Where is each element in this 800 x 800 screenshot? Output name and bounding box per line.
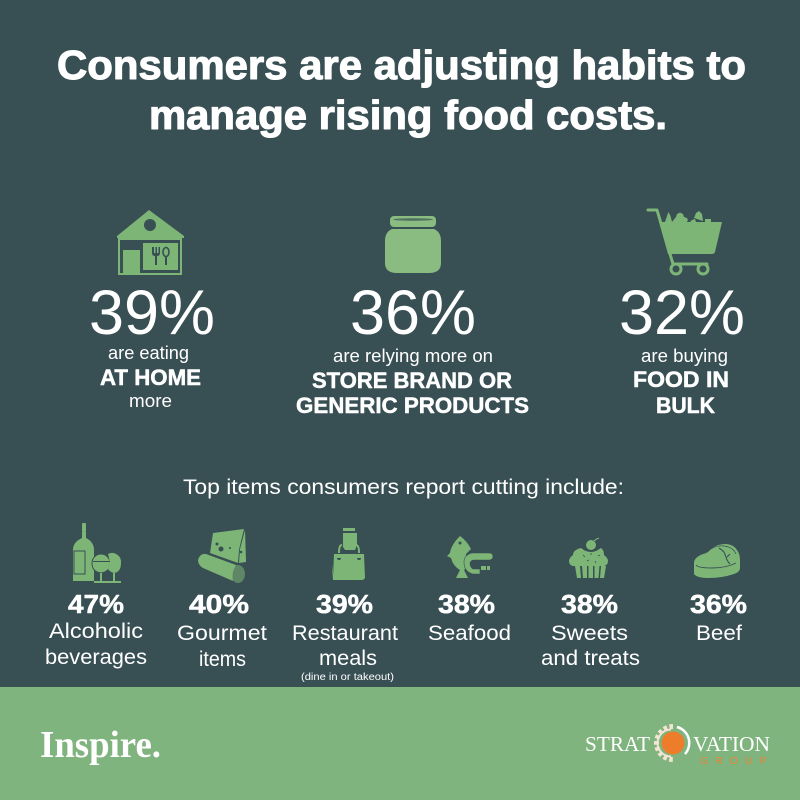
icon: steak xyxy=(694,544,740,578)
stat: store brand xyxy=(296,278,529,418)
item: alcoholic beverages: Alcoholic xyxy=(49,620,143,643)
item: restaurant meals: Restaurant xyxy=(292,622,398,645)
item: restaurant meals xyxy=(292,589,398,683)
icon: fish and shrimp xyxy=(447,536,493,578)
stat: store brand: GENERIC PRODUCTS xyxy=(296,393,529,418)
icon: jar xyxy=(385,216,441,273)
stat: store brand: 36% xyxy=(350,278,476,348)
stat: eating at home: 39% xyxy=(89,278,215,348)
icon: house with restaurant xyxy=(117,210,184,275)
item: beef: 36% xyxy=(690,589,747,619)
item: sweets and treats xyxy=(541,589,640,670)
item: sweets and treats: Sweets xyxy=(551,622,628,645)
item: gourmet items: 40% xyxy=(189,589,249,619)
item: alcoholic beverages: 47% xyxy=(68,589,124,619)
subheading: Top items consumers report cutting include: xyxy=(183,476,624,499)
item: seafood: Seafood xyxy=(428,622,511,645)
stat: eating at home: more xyxy=(129,391,172,411)
item: sweets and treats: 38% xyxy=(561,589,618,619)
logo: Inspire: Inspire. xyxy=(40,724,161,766)
logo: Stratovation Group: GROUP xyxy=(700,755,774,767)
icon: shopping cart xyxy=(648,210,722,274)
title: manage rising food costs. xyxy=(149,92,667,138)
stat: eating at home: are eating xyxy=(108,343,189,363)
stat: eating at home: AT HOME xyxy=(100,365,201,390)
footer band xyxy=(0,687,800,800)
item: gourmet items: items xyxy=(199,648,246,671)
icon: cheese xyxy=(198,529,246,583)
item: beef: Beef xyxy=(696,622,742,645)
stat: buying in bulk: are buying xyxy=(641,346,728,366)
logo: Stratovation Group xyxy=(585,726,774,767)
icon: restaurant takeout bag xyxy=(332,528,365,580)
stat: buying in bulk: FOOD IN xyxy=(633,367,729,392)
stat: store brand: STORE BRAND OR xyxy=(312,368,512,393)
icon: wine bottle and glasses xyxy=(73,523,121,583)
item: restaurant meals: (dine in or takeout) xyxy=(301,672,394,683)
item: beef xyxy=(690,589,747,645)
item: alcoholic beverages xyxy=(45,589,147,669)
logo: Stratovation Group: STRAT xyxy=(585,732,650,756)
item: alcoholic beverages: beverages xyxy=(45,646,147,669)
stat: store brand: are relying more on xyxy=(333,346,493,366)
stat: eating at home xyxy=(89,278,215,411)
item: sweets and treats: and treats xyxy=(541,647,640,670)
item: restaurant meals: meals xyxy=(319,647,377,670)
item: gourmet items: Gourmet xyxy=(177,622,267,645)
title xyxy=(57,42,746,138)
item: seafood: 38% xyxy=(438,589,495,619)
title: Consumers are adjusting habits to xyxy=(57,42,746,88)
stat: buying in bulk: BULK xyxy=(656,393,715,418)
item: seafood xyxy=(428,589,511,645)
item: gourmet items xyxy=(177,589,267,671)
item: restaurant meals: 39% xyxy=(316,589,373,619)
stat: buying in bulk xyxy=(619,278,745,418)
stat: buying in bulk: 32% xyxy=(619,278,745,348)
logo: Stratovation Group: VATION xyxy=(693,732,770,756)
icon: cupcake xyxy=(569,538,608,578)
